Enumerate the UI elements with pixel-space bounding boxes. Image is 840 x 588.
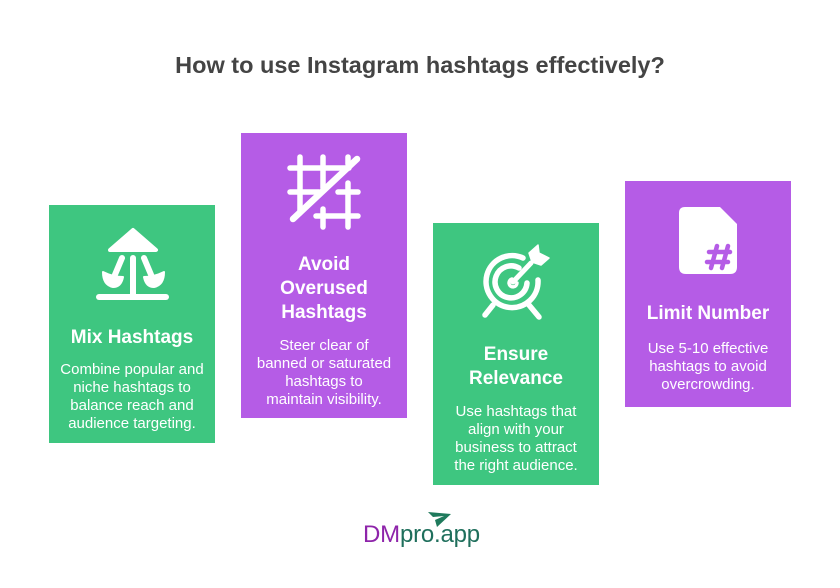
heading [280,254,368,323]
logo [363,512,480,548]
panel: avoid overused hashtags [241,133,407,418]
text block: Steer clear of [279,337,369,354]
heading: Relevance [469,368,563,389]
title: How to use Instagram hashtags effectively? [175,52,665,78]
heading: Mix Hashtags [71,327,193,348]
icon: carousel [96,228,169,300]
text block: Use 5-10 effective [648,340,768,357]
text block [257,337,391,408]
icon: document with hash [679,207,737,274]
logo text: DMpro.app [363,521,480,548]
text block: align with your [468,421,564,438]
text block: hashtags to avoid [649,358,767,375]
text block: business to attract [455,439,577,456]
text block: balance reach and [70,397,194,414]
text block: Use hashtags that [456,403,576,420]
panel: limit number [625,181,791,407]
heading: Overused [280,278,368,299]
panel: mix hashtags [49,205,215,443]
icon: target with arrow [482,244,550,320]
text block: banned or saturated [257,355,391,372]
text block: overcrowding. [661,376,755,393]
heading [469,344,563,389]
text block: maintain visibility. [266,391,382,408]
text block: the right audience. [454,457,578,474]
text block: niche hashtags to [73,379,191,396]
heading: Ensure [484,344,548,365]
heading: Limit Number [647,303,769,324]
text block [60,361,204,432]
text block: Combine popular and [60,361,204,378]
text block [648,340,768,393]
text block: audience targeting. [68,415,196,432]
heading: Hashtags [281,302,367,323]
icon: paper plane [428,512,451,527]
text block: hashtags to [285,373,363,390]
text block [454,403,578,474]
icon: crossed hashtag [287,154,361,230]
heading: Avoid [298,254,350,275]
panel: ensure relevance [433,223,599,485]
